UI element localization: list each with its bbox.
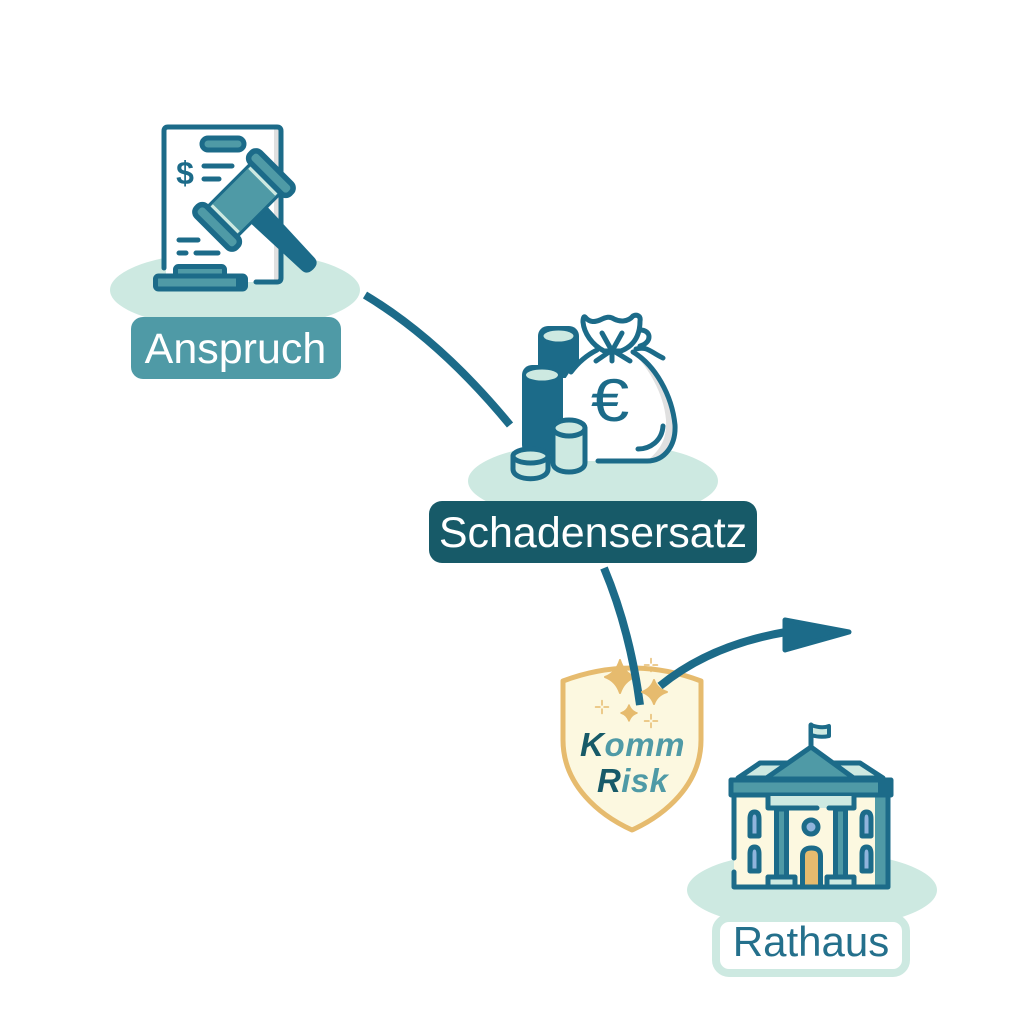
- Anspruch node: [110, 127, 360, 379]
- label: Anspruch: [131, 317, 341, 379]
- label: Anspruch: Anspruch: [145, 325, 326, 373]
- icon: money bag with coins: €: [591, 366, 629, 434]
- arrow: KommRisk outgoing: [660, 620, 849, 686]
- icon: money bag with coins: [513, 315, 675, 479]
- Rathaus node: [687, 725, 937, 973]
- arrow: Anspruch to Schadensersatz: [365, 295, 510, 425]
- label: Schadensersatz: Schadensersatz: [439, 509, 747, 557]
- icon: document with gavel: $: [176, 155, 194, 191]
- platform ellipse: Anspruch: [110, 251, 360, 329]
- KommRisk shield: [563, 658, 701, 830]
- platform ellipse: Schadensersatz: [468, 442, 718, 520]
- icon: town hall: [731, 725, 891, 887]
- arrow: Schadensersatz to KommRisk: [604, 568, 640, 705]
- sparkle over arrow: [642, 680, 667, 704]
- platform ellipse: Rathaus: [687, 851, 937, 929]
- Schadensersatz node: [429, 315, 757, 563]
- wordmark: Komm Risk: Komm: [580, 726, 685, 763]
- label: Rathaus: Rathaus: [733, 918, 889, 965]
- shield body: [563, 668, 701, 830]
- wordmark: Komm Risk: [580, 726, 685, 799]
- wordmark: Komm Risk: Risk: [597, 762, 670, 799]
- icon: document with gavel: [156, 127, 345, 301]
- sparkles: [596, 658, 658, 728]
